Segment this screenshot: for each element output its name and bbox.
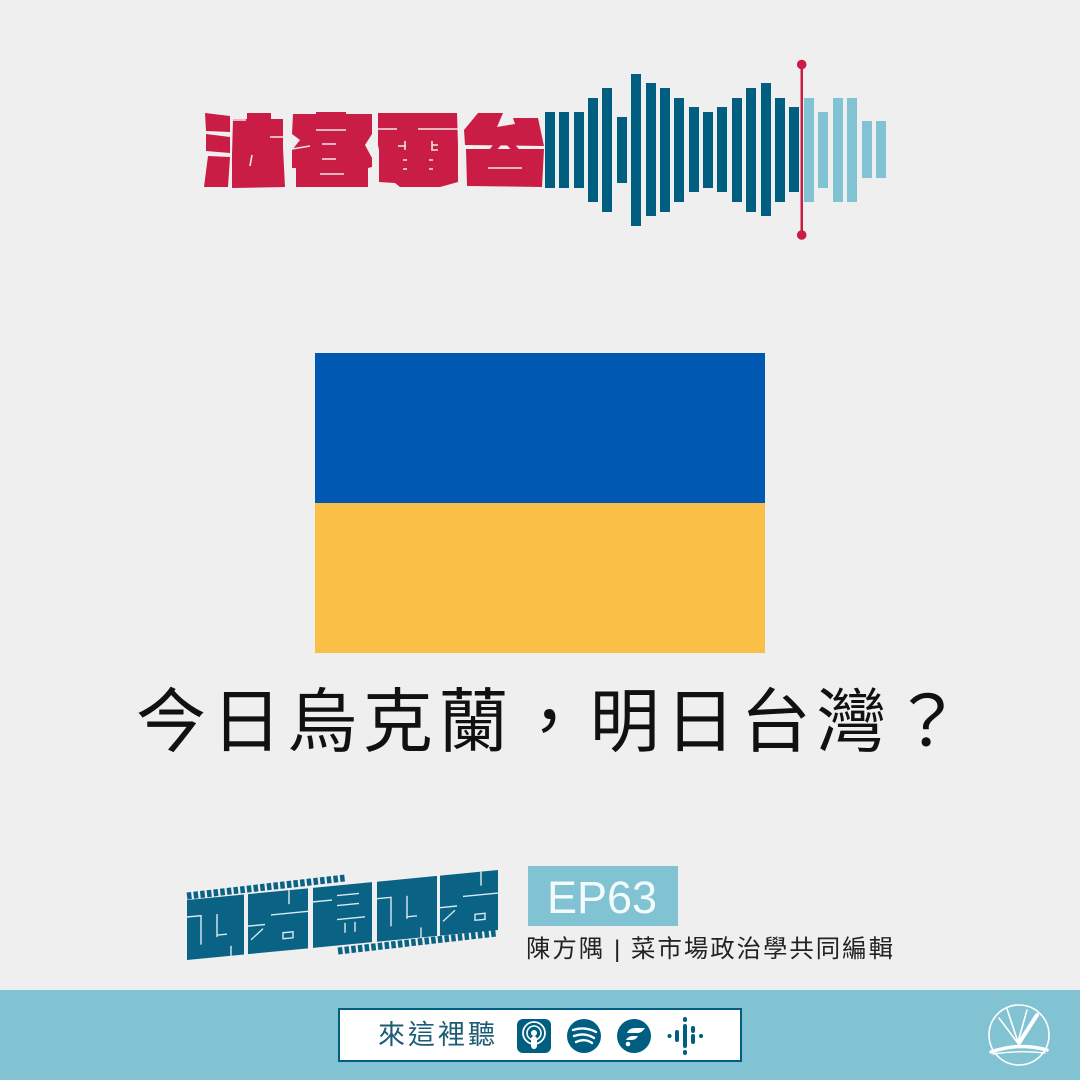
program logo: 政治歸政治 — [186, 862, 498, 967]
sound wave light bars — [804, 98, 886, 202]
icon: Apple Podcasts — [517, 1019, 551, 1053]
listen label: 來這裡聽 — [378, 1020, 498, 1050]
episode badge: EP63 — [547, 872, 657, 923]
logo wordmark: 台 — [482, 125, 526, 189]
footer band — [0, 990, 1080, 1080]
icon: Spotify — [567, 1019, 601, 1053]
editor credit: 陳方隅 | 菜市場政治學共同編輯 — [526, 936, 895, 963]
sound wave dark bars — [545, 74, 799, 226]
film strip dashes — [187, 878, 497, 951]
logo: 法客電台 with sound wave — [204, 60, 886, 240]
flag of Ukraine — [315, 353, 765, 653]
listen box — [338, 1008, 742, 1062]
logo wordmark: 電 — [391, 108, 445, 187]
icons: podcast platforms — [517, 1017, 704, 1055]
logo wordmark: 客 — [305, 108, 359, 187]
episode badge — [528, 866, 678, 926]
program logo text: 歸 — [316, 875, 368, 955]
title: 今日烏克蘭，明日台灣？ — [136, 683, 968, 761]
logo wordmark — [204, 108, 544, 189]
logo: bottom-right emblem — [988, 1004, 1050, 1066]
program logo text: 治 — [252, 881, 304, 961]
program logo text: 治 — [443, 862, 495, 942]
playhead marker — [797, 60, 806, 240]
logo wordmark: 法 — [234, 114, 282, 184]
program logo text — [187, 862, 498, 967]
program logo text: 政 — [381, 868, 433, 948]
program logo text: 政 — [189, 887, 241, 967]
icon: Google Podcasts — [670, 1019, 701, 1053]
icon: Firstory — [617, 1019, 651, 1053]
